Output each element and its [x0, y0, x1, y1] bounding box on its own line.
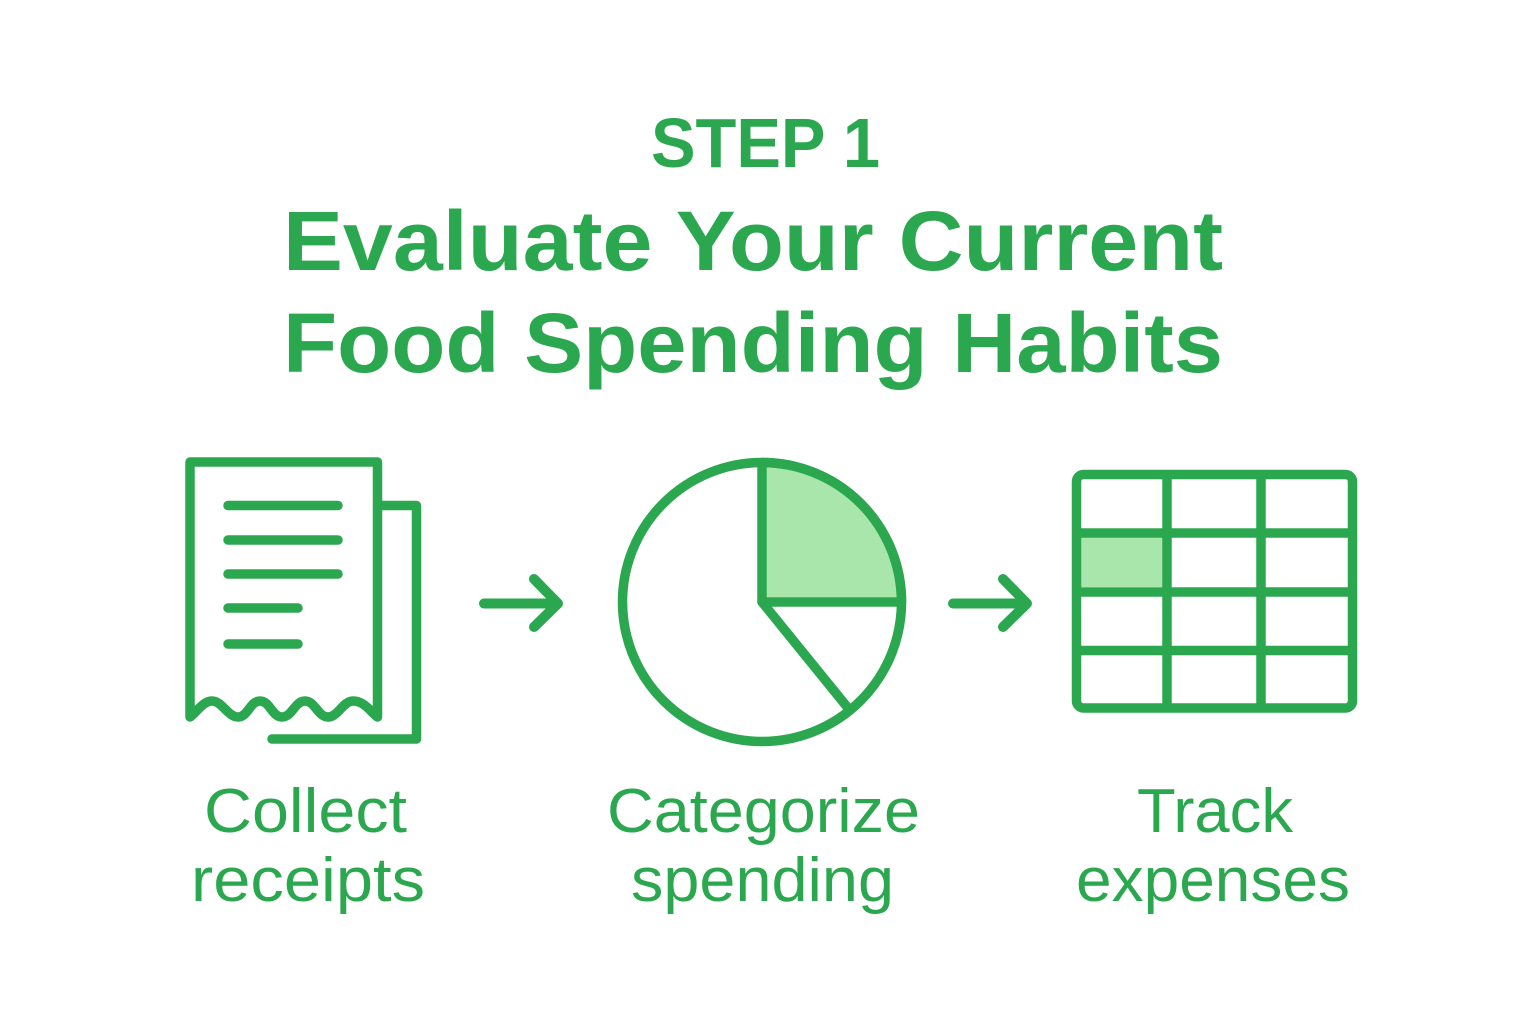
icon: receipts [190, 462, 416, 739]
label: categorize spending: spending [631, 846, 894, 915]
highlighted table cell [1080, 537, 1164, 587]
highlighted pie slice [762, 462, 902, 602]
title: Food Spending Habits [283, 296, 1223, 390]
label: categorize spending: Categorize [607, 777, 920, 846]
title [283, 194, 1223, 390]
label: collect receipts: receipts [191, 846, 425, 915]
receipt text lines [228, 506, 338, 644]
arrow: pie chart to table [953, 579, 1027, 627]
front receipt with wavy edge [190, 462, 378, 717]
label: track expenses: Track [1137, 777, 1294, 846]
back receipt sheet [272, 506, 416, 739]
icon: expense table [1076, 474, 1352, 708]
label: collect receipts: Collect [204, 777, 407, 846]
label: track expenses [1076, 777, 1350, 915]
icon: pie chart [622, 462, 902, 742]
title: Evaluate Your Current [283, 194, 1223, 288]
label: track expenses: expenses [1076, 846, 1350, 915]
label: categorize spending [607, 777, 920, 915]
step label: STEP 1 [651, 104, 880, 182]
pie slice divider [762, 602, 848, 708]
arrow: receipts to pie chart [484, 579, 558, 627]
label: collect receipts [191, 777, 425, 915]
table grid [1076, 474, 1352, 708]
pie outline [622, 462, 902, 742]
